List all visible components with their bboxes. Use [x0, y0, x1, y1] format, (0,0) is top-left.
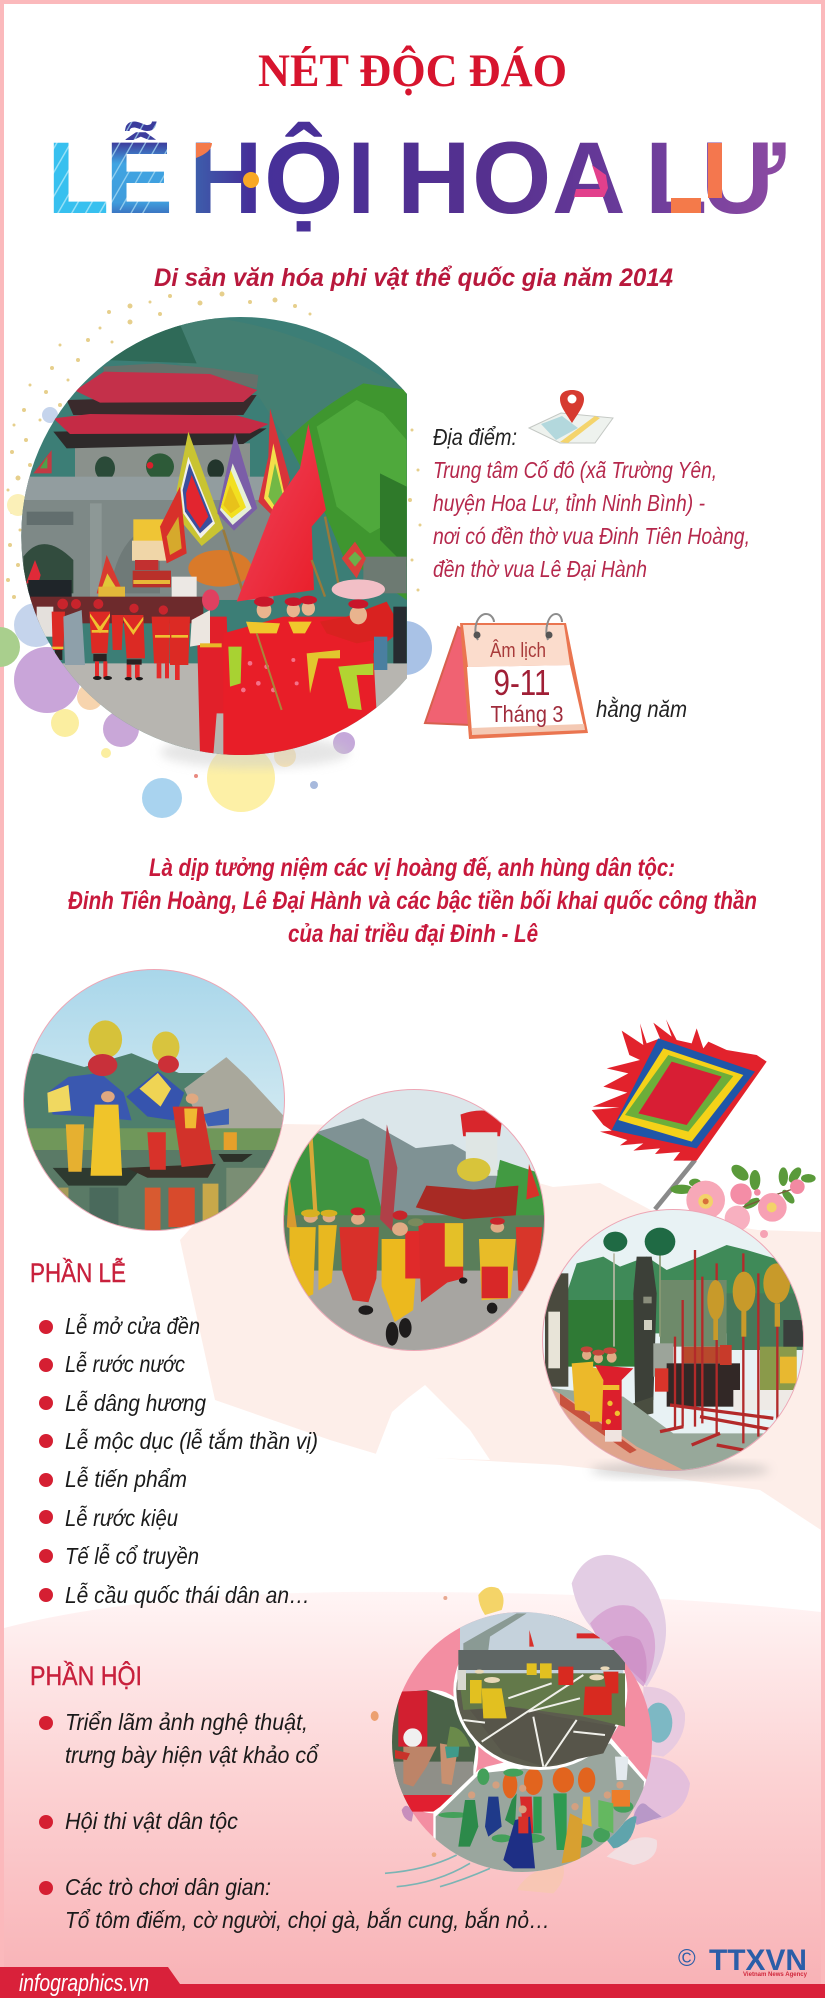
title accent: pink inside A — [574, 165, 608, 197]
location pin icon — [529, 390, 613, 443]
calendar icon — [425, 614, 588, 739]
title accent: orange dot — [243, 172, 259, 188]
far right bystanders — [393, 607, 407, 663]
ritual flags — [177, 432, 223, 546]
title: Lễ hội Hoa Lư: H — [397, 121, 471, 235]
white mound in brush shape — [375, 1385, 490, 1460]
title: Lễ hội Hoa Lư: I — [347, 121, 375, 235]
title: Lễ hội Hoa Lư: A — [552, 121, 626, 235]
bullet item 4: Lễ mộc dục (lễ tắm thần vị) — [65, 1427, 318, 1454]
photo: temple courtyard — [540, 1207, 807, 1478]
title: Lễ hội Hoa Lư: Ễ — [105, 121, 173, 235]
bullet item: exhibition: Triển lãm ảnh nghệ thuật, — [65, 1709, 308, 1735]
bullet item 8: Lễ cầu quốc thái dân an… — [65, 1581, 310, 1608]
TTXVN logo — [678, 1944, 807, 1978]
bullet item 2: Lễ rước nước — [65, 1350, 185, 1377]
ground — [552, 1388, 764, 1470]
lower pink gradient — [4, 1592, 821, 1998]
flower branch — [670, 1162, 816, 1238]
title: Lễ hội Hoa Lư — [47, 121, 786, 235]
title: Lễ hội Hoa Lư: L — [645, 121, 707, 235]
float — [133, 519, 164, 541]
small flag — [96, 555, 121, 594]
bullet item: folk games: Các trò chơi dân gian: — [65, 1874, 271, 1900]
gate body — [23, 477, 268, 501]
calendar text: month: Tháng 3 — [490, 701, 564, 727]
left marchers — [30, 597, 203, 623]
festival collage — [388, 1607, 652, 1873]
bullet item: exhibition: trưng bày hiện vật khảo cổ — [65, 1742, 319, 1768]
title accent: orange on L — [671, 198, 701, 213]
bullet item 1: Lễ mở cửa đền — [65, 1312, 200, 1339]
right marchers — [223, 617, 397, 767]
location text: đền thờ vua Lê Đại Hành — [433, 556, 647, 582]
photo: palanquin procession — [282, 1087, 550, 1358]
bullet item 7: Tế lễ cổ truyền — [65, 1542, 199, 1569]
shrine — [653, 1343, 673, 1377]
big red flag — [237, 424, 326, 602]
palms — [613, 1253, 615, 1347]
boats — [53, 1168, 142, 1186]
title: Lễ hội Hoa Lư: L — [47, 121, 109, 235]
tree — [287, 383, 407, 600]
location text: huyện Hoa Lư, tỉnh Ninh Bình) - — [433, 490, 705, 516]
bullet item: wrestling: Hội thi vật dân tộc — [65, 1808, 238, 1834]
bullet item 6: Lễ rước kiệu — [65, 1504, 178, 1531]
subtitle: Di sản văn hóa phi vật thể quốc gia năm 2014 — [154, 264, 673, 292]
pillar — [633, 1257, 657, 1403]
photo: dragon boats — [21, 966, 289, 1235]
title accent: orange on U stem — [708, 143, 722, 198]
location text: nơi có đền thờ vua Đinh Tiên Hoàng, — [433, 523, 750, 549]
footer site name: infographics.vn — [19, 1970, 149, 1997]
photo: fan dance — [433, 1737, 647, 1873]
bullet item: folk games: Tổ tôm điếm, cờ người, chọi gà, bắn cung, bắn nỏ… — [65, 1907, 550, 1933]
bullet item: exhibition — [39, 1709, 319, 1768]
decorative bubbles — [0, 407, 432, 818]
location label: Địa điểm: — [433, 424, 517, 450]
bullet item 3: Lễ dâng hương — [65, 1389, 206, 1416]
title: Lễ hội Hoa Lư: O — [472, 121, 551, 235]
agency name: Vietnam News Agency — [743, 1971, 807, 1978]
commemoration text — [68, 854, 757, 948]
roofs — [67, 395, 257, 415]
photo: wrestling — [388, 1690, 478, 1813]
performers — [91, 1105, 122, 1176]
main photo: Hoa Lu procession — [10, 300, 410, 767]
list: Phần hội — [39, 1709, 550, 1933]
calendar text: date: 9-11 — [494, 662, 550, 703]
flag icon — [592, 1019, 767, 1209]
red fence — [660, 1250, 777, 1450]
commemoration text: Là dịp tưởng niệm các vị hoàng đế, anh hùng dân tộc: — [149, 854, 675, 882]
bullet item 5: Lễ tiến phẩm — [65, 1465, 187, 1492]
palanquin — [461, 1111, 503, 1136]
pale peach brush shape — [180, 1124, 821, 1530]
title: Lễ hội Hoa Lư: Ộ — [264, 121, 343, 235]
women — [572, 1362, 593, 1412]
calendar text: lunar: Âm lịch — [490, 639, 546, 662]
gold star sprinkle — [6, 292, 422, 612]
gate tower — [75, 443, 250, 480]
bullet item: folk games — [39, 1874, 550, 1933]
commemoration text: của hai triều đại Đinh - Lê — [288, 920, 538, 948]
blue dragon bodies — [47, 1073, 132, 1120]
decorative petals around collage — [371, 1555, 690, 1893]
list: Phần lễ — [39, 1312, 318, 1608]
photo: human chess — [453, 1607, 627, 1770]
section heading: Phần hội: PHẦN HỘI — [30, 1660, 142, 1691]
pavement — [296, 1270, 532, 1350]
right small flag — [342, 542, 366, 578]
dragon heads — [88, 1020, 122, 1058]
left gate — [545, 1273, 568, 1387]
footer bar — [0, 1967, 825, 1998]
centre column — [197, 617, 230, 755]
title: Lễ hội Hoa Lư: Ư — [701, 121, 786, 235]
marchers — [289, 1227, 316, 1300]
copyright mark: © — [678, 1945, 696, 1972]
ground — [62, 663, 407, 755]
title: Nét độc đáo: NÉT ĐỘC ĐÁO — [258, 45, 567, 97]
title: Lễ hội Hoa Lư: H — [189, 121, 263, 235]
title accent: orange corner on H — [196, 143, 212, 158]
location text — [433, 457, 750, 582]
agency wordmark: TTXVN — [709, 1944, 807, 1977]
pink umbrella — [332, 579, 385, 599]
annual label: hằng năm — [596, 696, 687, 722]
section heading: Phần lễ: PHẦN LỄ — [30, 1257, 126, 1288]
location text: Trung tâm Cố đô (xã Trường Yên, — [433, 457, 717, 483]
